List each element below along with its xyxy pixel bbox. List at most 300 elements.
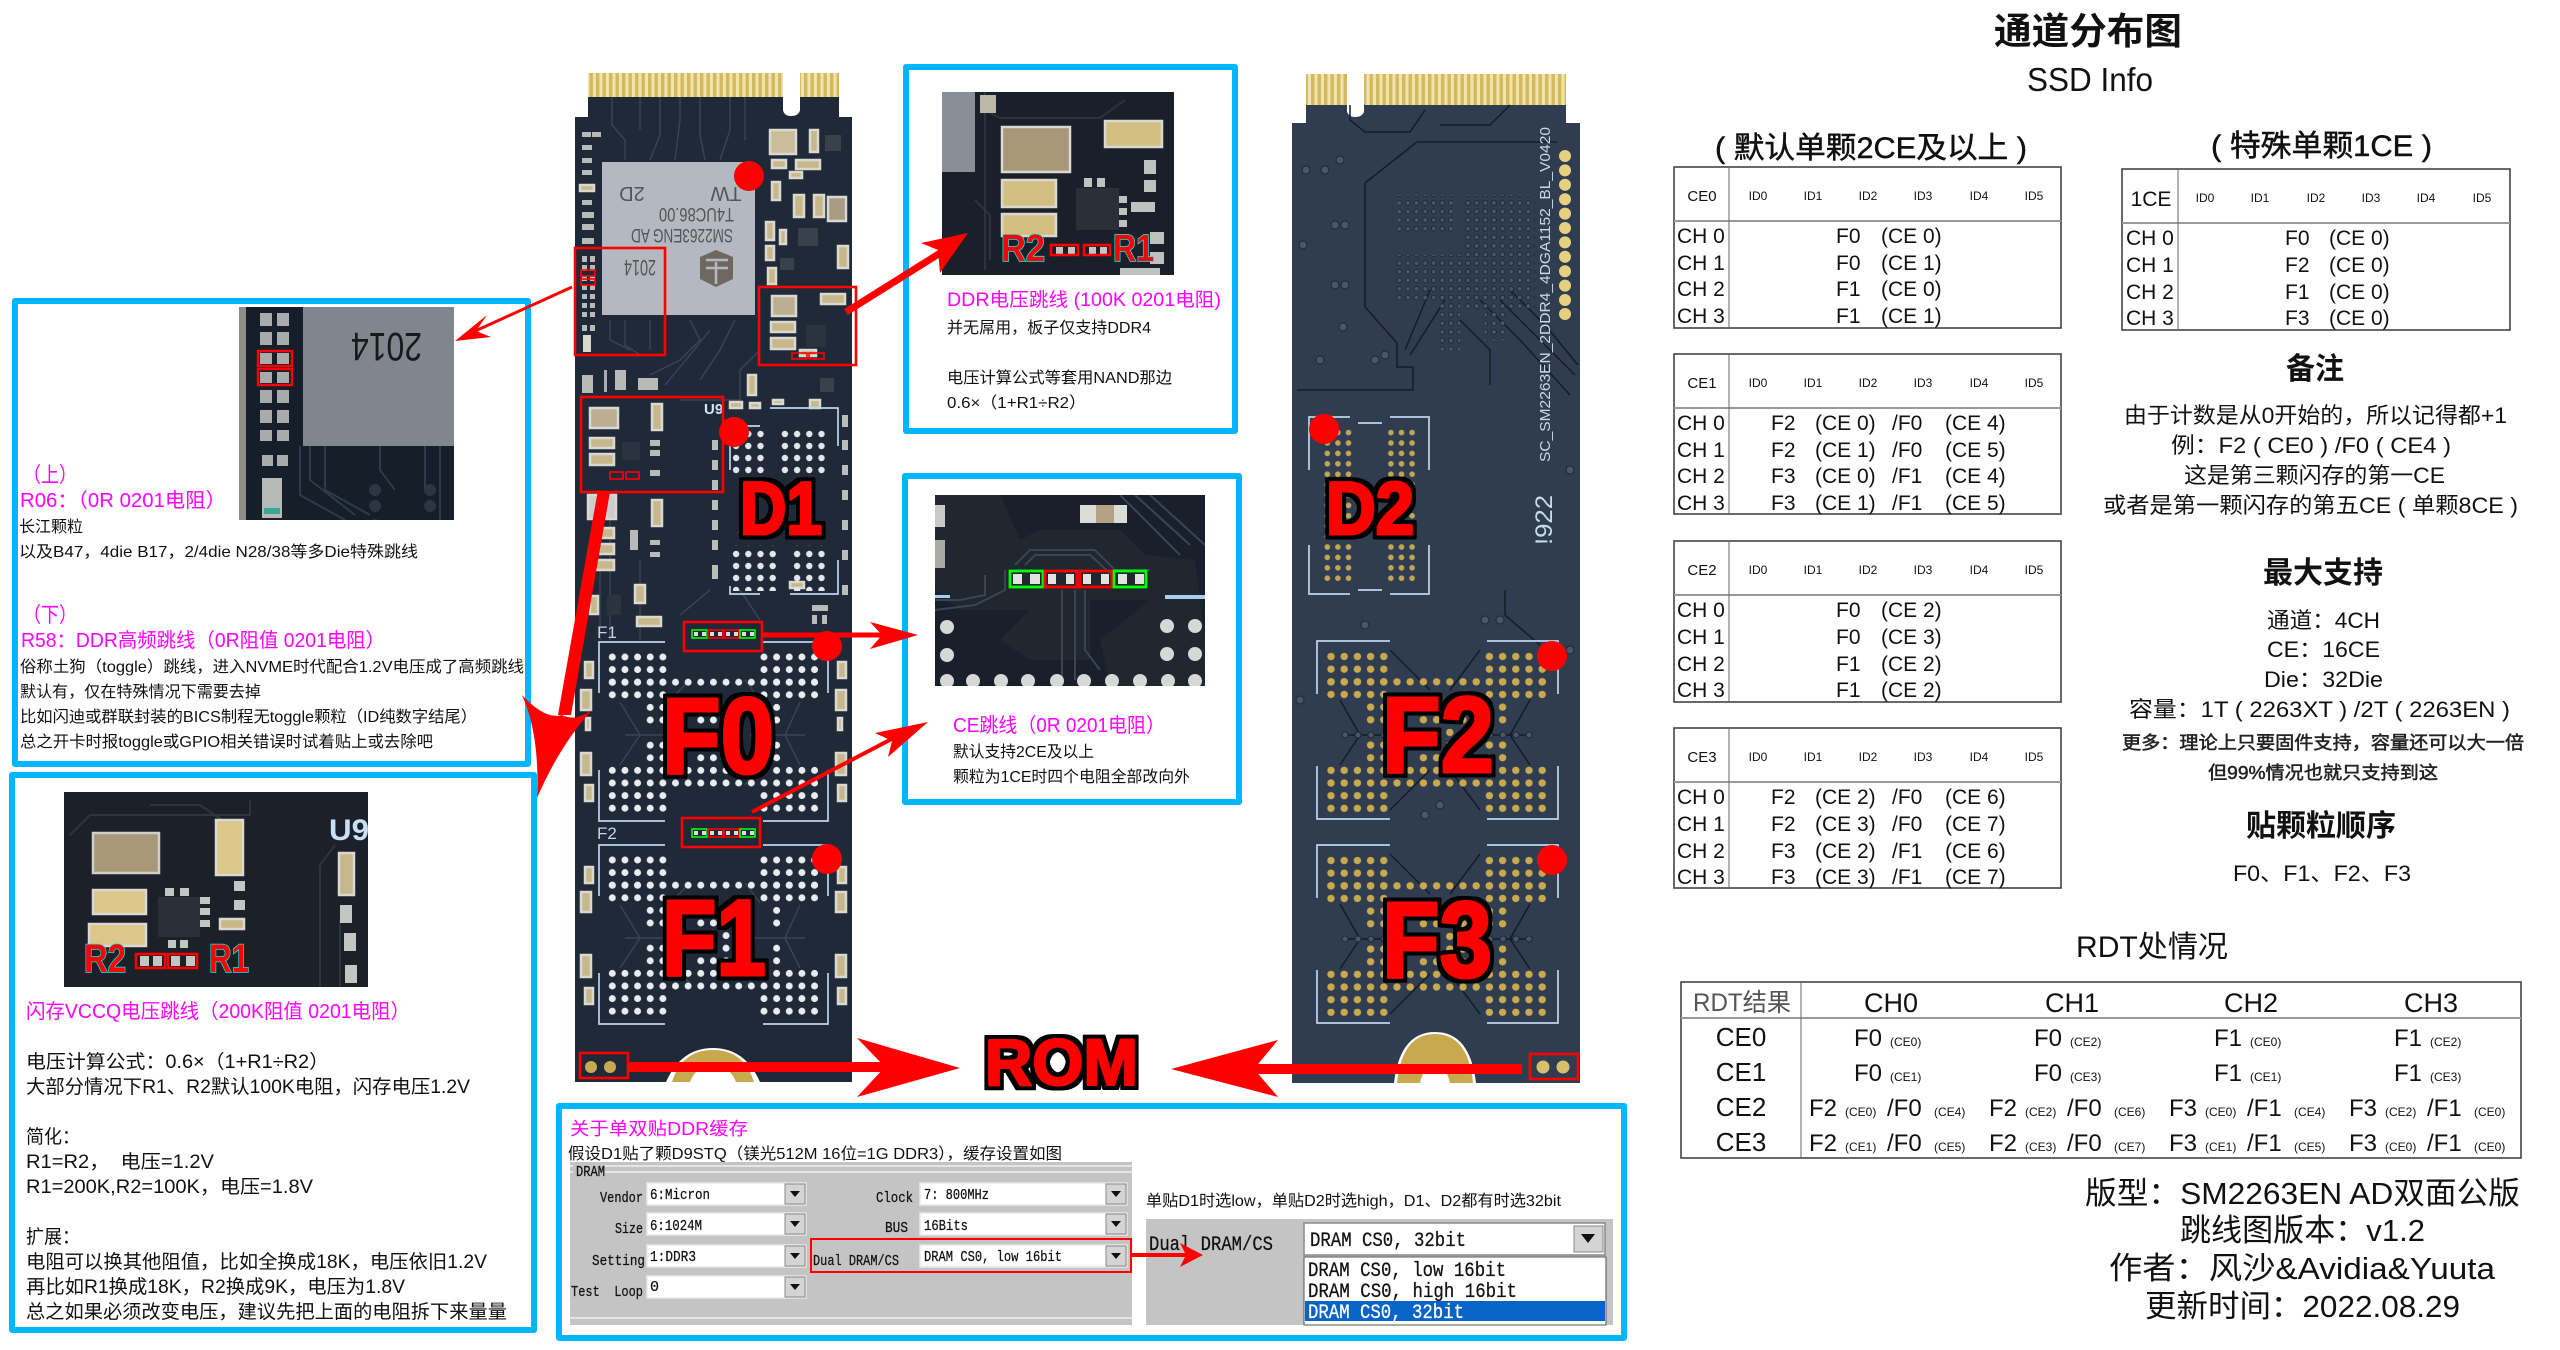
RDT table: F0: [1854, 1025, 1882, 1052]
RDT table: (CE2): [2070, 1035, 2101, 1049]
controller chip: T4UC86.00: [659, 203, 734, 224]
R06 heading: R06：（0R 0201电阻）: [20, 489, 226, 512]
table 1CE: ID5: [2473, 191, 2492, 205]
table 1CE: F3: [2285, 307, 2310, 330]
RDT table: (CE2): [2385, 1105, 2416, 1119]
RDT table: (CE1): [2205, 1140, 2236, 1154]
RDT table: /F0: [2067, 1095, 2102, 1122]
photo: DDR voltage close-up: [942, 92, 1174, 276]
table CE3: (CE 6): [1945, 786, 2006, 809]
table CE0: F0: [1836, 225, 1861, 248]
photo: DDR voltage close-up: R2: [1001, 228, 1045, 270]
table CE1: ID4: [1970, 376, 1989, 390]
RDT table: /F1: [2247, 1130, 2282, 1157]
table CE1: /F0: [1892, 412, 1922, 435]
DRAM settings dialog: 6:Micron: [650, 1187, 710, 1204]
silkscreen labels: [597, 401, 838, 843]
table CE0: ID1: [1804, 189, 1823, 203]
DRAM settings dialog: Vendor: [600, 1190, 643, 1207]
RDT table: [1681, 982, 2521, 1158]
table 1CE: CH 0: [2126, 227, 2174, 250]
table 1CE: ID0: [2196, 191, 2215, 205]
formula block: 大部分情况下R1、R2默认100K电阻，闪存电压1.2V: [26, 1076, 470, 1098]
RDT table: (CE6): [2114, 1105, 2145, 1119]
table CE1: (CE 1): [1815, 439, 1876, 462]
VCCQ heading: 闪存VCCQ电压跳线（200K阻值 0201电阻）: [26, 1000, 410, 1023]
table CE2: ID4: [1970, 563, 1989, 577]
table CE2: ID2: [1859, 563, 1878, 577]
DDR voltage description: 电压计算公式等套用NAND那边: [947, 368, 1172, 387]
RDT table: (CE0): [2205, 1105, 2236, 1119]
table CE1: CH 0: [1677, 412, 1725, 435]
RDT table: (CE7): [2114, 1140, 2145, 1154]
table CE0: (CE 0): [1881, 225, 1942, 248]
table CE1: ID2: [1859, 376, 1878, 390]
RDT table: (CE0): [1890, 1035, 1921, 1049]
table CE1: CH 1: [1677, 439, 1725, 462]
RDT table: CH0: [1864, 988, 1918, 1018]
F2: F2: [1382, 674, 1494, 795]
gold edge connector: [1306, 74, 1566, 105]
RDT table: (CE1): [1845, 1140, 1876, 1154]
DRAM settings dialog: 0: [650, 1279, 659, 1296]
controller chip: TW: [710, 182, 742, 204]
DRAM dropdown dialog: DRAM CS0, 32bit: [1310, 1230, 1466, 1253]
extended block: 总之如果必须改变电压，建议先把上面的电阻拆下来量量: [26, 1301, 507, 1323]
DRAM dropdown dialog: [1146, 1219, 1613, 1325]
max support heading: 最大支持: [2263, 557, 2383, 590]
table CE0: CH 2: [1677, 278, 1725, 301]
RDT table: (CE0): [2385, 1140, 2416, 1154]
table CE0: F0: [1836, 252, 1861, 275]
DDR cache description: 假设D1贴了颗D9STQ（镁光512M 16位=1G DDR3），缓存设置如图: [568, 1145, 1062, 1163]
table CE3: (CE 2): [1815, 786, 1876, 809]
table CE3: (CE 7): [1945, 866, 2006, 889]
RDT table: F1: [2394, 1025, 2422, 1052]
F3: F3: [1382, 879, 1492, 1000]
RDT table: (CE4): [2294, 1105, 2325, 1119]
table CE3: /F1: [1892, 840, 1922, 863]
table 1CE: F1: [2285, 281, 2310, 304]
simplified block: [26, 1126, 313, 1198]
DRAM settings dialog: DRAM: [576, 1164, 605, 1181]
RDT table: F2: [1989, 1095, 2017, 1122]
table CE1: F3: [1771, 492, 1796, 515]
notes text: 例：F2 ( CE0 ) /F0 ( CE4 ): [2171, 433, 2451, 458]
R58 description: 俗称土狗（toggle）跳线，进入NVME时代配合1.2V电压成了高频跳线: [20, 658, 524, 676]
table CE3: ID5: [2025, 750, 2044, 764]
arrow: R06 box to R06 photo: [455, 287, 572, 341]
DRAM settings dialog: BUS: [885, 1220, 908, 1237]
DDR voltage description: 并无屌用，板子仅支持DDR4: [947, 319, 1151, 337]
F0: F0: [662, 675, 774, 796]
table CE0: CH 0: [1677, 225, 1725, 248]
table CE2: ID1: [1804, 563, 1823, 577]
D2 label: D2: [1326, 467, 1414, 550]
formula block: [26, 1051, 470, 1098]
R58 description: [20, 658, 524, 751]
F1: F1: [662, 877, 766, 998]
RDT table: RDT结果: [1693, 989, 1791, 1017]
credits block: 作者：风沙&Avidia&Yuuta: [2109, 1251, 2496, 1286]
NAND ball grids F2 F3: [1317, 641, 1558, 1023]
R06 description: 长江颗粒: [19, 518, 83, 536]
NAND ball grids F0 F1: [599, 642, 828, 1024]
credits block: 跳线图版本：v1.2: [2180, 1213, 2425, 1248]
notes text: 由于计数是从0开始的，所以记得都+1: [2124, 403, 2507, 428]
table CE1: /F1: [1892, 465, 1922, 488]
R58 heading: R58：DDR高频跳线（0R阻值 0201电阻）: [21, 629, 385, 652]
DRAM settings dialog: Test Loop: [571, 1284, 643, 1301]
table CE3: CH 2: [1677, 840, 1725, 863]
mount order heading: 贴颗粒顺序: [2246, 810, 2396, 843]
R58 description: 默认有，仅在特殊情况下需要去掉: [20, 683, 261, 701]
table 1CE: (CE 0): [2329, 307, 2390, 330]
RDT table: CH2: [2224, 988, 2278, 1018]
table CE0: F1: [1836, 305, 1861, 328]
panel: DDR voltage jumper: [906, 67, 1235, 431]
panel: CE jumper: [905, 476, 1239, 802]
DDR voltage description: 0.6×（1+R1÷R2）: [947, 394, 1086, 412]
RDT table: CH3: [2404, 988, 2458, 1018]
DRAM dropdown dialog: DRAM CS0, low 16bit: [1308, 1260, 1506, 1283]
table CE1: /F0: [1892, 439, 1922, 462]
notes heading: 备注: [2286, 353, 2344, 386]
max support text: Die：32Die: [2264, 667, 2383, 692]
notes text: 或者是第一颗闪存的第五CE ( 单颗8CE ): [2103, 493, 2518, 518]
table CE3: ID3: [1914, 750, 1933, 764]
table CE0: ID4: [1970, 189, 1989, 203]
extended block: 再比如R1换成18K，R2换成9K，电压为1.8V: [26, 1276, 405, 1298]
RDT table: (CE1): [1890, 1070, 1921, 1084]
DRAM settings dialog: Dual DRAM/CS: [813, 1253, 899, 1270]
table CE0: (CE 1): [1881, 252, 1942, 275]
table CE0: F1: [1836, 278, 1861, 301]
back side traces and vias: [1296, 105, 1578, 819]
credits block: 更新时间：2022.08.29: [2145, 1289, 2460, 1324]
R06 description: [19, 518, 418, 561]
table CE1: (CE 5): [1945, 492, 2006, 515]
R58 description: 比如闪迪或群联封装的BICS制程无toggle颗粒（ID纯数字结尾）: [20, 708, 477, 726]
RDT table: (CE0): [1845, 1105, 1876, 1119]
DRAM settings dialog: 6:1024M: [650, 1218, 702, 1235]
DRAM settings dialog: 16Bits: [924, 1218, 968, 1235]
max support text: [2122, 608, 2524, 783]
RDT table: F2: [1989, 1130, 2017, 1157]
jumper highlight boxes: [575, 248, 856, 1078]
RDT table: (CE2): [2025, 1105, 2056, 1119]
RDT table: CH1: [2045, 988, 2099, 1018]
panel: VCCQ voltage jumper: [12, 775, 534, 1330]
table CE1: CE1: [1687, 375, 1717, 392]
table 1CE: CH 2: [2126, 281, 2174, 304]
table CE0: ID0: [1749, 189, 1768, 203]
PCB traces and small parts: [580, 97, 848, 1004]
table CE2: CH 0: [1677, 599, 1725, 622]
silkscreen labels: F1: [597, 623, 617, 642]
pin-1 dots: [719, 161, 842, 874]
controller chip: [602, 162, 755, 315]
photo: VCCQ close-up: R1: [209, 937, 249, 981]
silkscreen date code: !922: [1531, 495, 1558, 545]
max support text: 容量：1T ( 2263XT ) /2T ( 2263EN ): [2129, 697, 2510, 722]
table 1CE: 1CE: [2131, 188, 2171, 211]
RDT table: (CE2): [2430, 1035, 2461, 1049]
table 1CE: (CE 0): [2329, 281, 2390, 304]
pin-1 dots: [1309, 414, 1567, 875]
table 1CE: ID3: [2362, 191, 2381, 205]
controller chip: SM2263ENG AD: [631, 224, 733, 245]
table CE3: ID1: [1804, 750, 1823, 764]
table CE3: /F0: [1892, 813, 1922, 836]
credits block: 版型：SM2263EN AD双面公版: [2085, 1176, 2520, 1211]
RDT table: F3: [2169, 1130, 2197, 1157]
RDT table: (CE0): [2474, 1105, 2505, 1119]
DRAM dropdown dialog: DRAM CS0, high 16bit: [1308, 1281, 1517, 1304]
RDT table: (CE1): [2250, 1070, 2281, 1084]
RDT table: (CE3): [2070, 1070, 2101, 1084]
table CE2: CH 3: [1677, 679, 1725, 702]
extended block: [26, 1226, 507, 1323]
board body: [575, 97, 852, 1082]
simplified block: 简化：: [26, 1126, 80, 1148]
RDT table: (CE0): [2250, 1035, 2281, 1049]
max support text: 更多：理论上只要固件支持，容量还可以大一倍: [2122, 733, 2524, 753]
mount order text: F0、F1、F2、F3: [2233, 861, 2411, 886]
table CE3: (CE 3): [1815, 813, 1876, 836]
table CE0: ID2: [1859, 189, 1878, 203]
table CE2: F1: [1836, 679, 1861, 702]
table CE3: ID4: [1970, 750, 1989, 764]
max support text: 但99%情况也就只支持到这: [2208, 763, 2438, 783]
photo: VCCQ close-up: U9: [329, 814, 369, 847]
table CE3: ID0: [1749, 750, 1768, 764]
DRAM settings dialog: Clock: [876, 1190, 913, 1207]
CE jumper description: [953, 743, 1190, 786]
RDT table: (CE3): [2025, 1140, 2056, 1154]
table 1CE: F2: [2285, 254, 2310, 277]
RDT table: /F0: [1887, 1095, 1922, 1122]
RDT table: (CE4): [1934, 1105, 1965, 1119]
RDT table: F2: [1809, 1095, 1837, 1122]
arrow: CE box to CE text: [752, 722, 928, 812]
ROM pads box: [1530, 1054, 1578, 1079]
panel: R06 R58 jumpers: [15, 301, 528, 764]
RDT table: F1: [2214, 1025, 2242, 1052]
DRAM ball grid D2: [1309, 417, 1429, 594]
table CE1: [1674, 354, 2061, 515]
DRAM dropdown dialog: DRAM CS0, 32bit: [1308, 1302, 1464, 1325]
table CE3: F3: [1771, 840, 1796, 863]
DRAM ball grid D1: [730, 428, 830, 591]
table CE1: F3: [1771, 465, 1796, 488]
formula block: 电压计算公式：0.6×（1+R1÷R2）: [26, 1051, 329, 1073]
DRAM settings dialog: Size: [615, 1221, 643, 1238]
table CE1: ID0: [1749, 376, 1768, 390]
heading: default 2CE: ( 默认单颗2CE及以上 ): [1715, 132, 2027, 165]
RDT table: (CE3): [2430, 1070, 2461, 1084]
RDT table: /F1: [2427, 1095, 2462, 1122]
DRAM settings dialog: 1:DDR3: [650, 1249, 696, 1266]
table CE1: ID5: [2025, 376, 2044, 390]
photo: VCCQ close-up: R2: [84, 937, 126, 981]
table CE1: (CE 4): [1945, 465, 2006, 488]
table CE1: /F1: [1892, 492, 1922, 515]
RDT table: F0: [2034, 1060, 2062, 1087]
table CE2: (CE 2): [1881, 599, 1942, 622]
RDT table: /F0: [1887, 1130, 1922, 1157]
table 1CE: (CE 0): [2329, 227, 2390, 250]
table CE3: CH 1: [1677, 813, 1725, 836]
table CE2: (CE 3): [1881, 626, 1942, 649]
DRAM settings dialog: 7: 800MHz: [924, 1187, 989, 1204]
table CE3: (CE 2): [1815, 840, 1876, 863]
DRAM settings dialog: [570, 1162, 1132, 1325]
mounting hole: [672, 1050, 754, 1082]
RDT table: (CE0): [2474, 1140, 2505, 1154]
back side gold pads column: [1559, 150, 1571, 320]
table 1CE: [2122, 169, 2510, 330]
R58 description: 总之开卡时报toggle或GPIO相关错误时试着贴上或去除吧: [20, 733, 433, 751]
photo: R06 R58 close-up: [239, 307, 454, 531]
table 1CE: CH 1: [2126, 254, 2174, 277]
title: 通道分布图: [1994, 11, 2182, 52]
ROM label: ROM: [985, 1025, 1138, 1099]
RDT table: /F0: [2067, 1130, 2102, 1157]
table 1CE: F0: [2285, 227, 2310, 250]
table CE0: [1674, 167, 2061, 328]
extended block: 电阻可以换其他阻值，比如全换成18K，电压依旧1.2V: [26, 1251, 487, 1273]
table CE3: [1674, 728, 2061, 889]
table CE3: /F1: [1892, 866, 1922, 889]
table CE3: ID2: [1859, 750, 1878, 764]
RDT table: F1: [2394, 1060, 2422, 1087]
table 1CE: CH 3: [2126, 307, 2174, 330]
silkscreen labels: U9: [704, 401, 723, 418]
notes text: 这是第三颗闪存的第一CE: [2184, 463, 2445, 488]
table 1CE: ID4: [2417, 191, 2436, 205]
table CE0: ID3: [1914, 189, 1933, 203]
photo: VCCQ close-up: [64, 792, 369, 987]
table CE2: F0: [1836, 599, 1861, 622]
table CE1: ID1: [1804, 376, 1823, 390]
right PCB board (back side): [1292, 74, 1580, 1083]
RDT table: CE3: [1716, 1127, 1766, 1157]
table CE1: CH 2: [1677, 465, 1725, 488]
arrow: left ROM pads to ROM: [628, 1038, 960, 1097]
arrow: DDR voltage box to photo: [846, 233, 968, 312]
arrow: right ROM pads to ROM: [1171, 1040, 1522, 1097]
DRAM settings dialog: Setting: [592, 1253, 645, 1270]
table CE2: F0: [1836, 626, 1861, 649]
table CE3: (CE 7): [1945, 813, 2006, 836]
max support text: 通道：4CH: [2267, 608, 2380, 633]
table 1CE: ID1: [2251, 191, 2270, 205]
RDT table: /F1: [2427, 1130, 2462, 1157]
photo: DDR voltage close-up: R1: [1113, 228, 1154, 270]
table CE3: F2: [1771, 813, 1796, 836]
DRAM dropdown dialog: Dual DRAM/CS: [1149, 1234, 1273, 1257]
table CE0: (CE 0): [1881, 278, 1942, 301]
table CE3: F3: [1771, 866, 1796, 889]
RDT table: CE1: [1716, 1057, 1766, 1087]
D1 label: D1: [740, 467, 822, 550]
table CE1: CH 3: [1677, 492, 1725, 515]
table CE2: (CE 2): [1881, 679, 1942, 702]
DDR cache heading: 关于单双贴DDR缓存: [570, 1119, 748, 1139]
RDT table: F3: [2169, 1095, 2197, 1122]
RDT table: F0: [2034, 1025, 2062, 1052]
RDT table: F3: [2349, 1130, 2377, 1157]
table CE1: F2: [1771, 412, 1796, 435]
R58 heading: （下）: [23, 604, 77, 627]
board body: [1292, 105, 1580, 1083]
table CE1: (CE 1): [1815, 492, 1876, 515]
table CE1: F2: [1771, 439, 1796, 462]
table CE0: CH 3: [1677, 305, 1725, 328]
dual DRAM note: 单贴D1时选low，单贴D2时选high，D1、D2都有时选32bit: [1146, 1192, 1562, 1210]
simplified block: R1=200K,R2=100K，电压=1.8V: [26, 1176, 313, 1198]
simplified block: R1=R2， 电压=1.2V: [26, 1151, 214, 1173]
mounting hole: [1397, 1034, 1473, 1083]
table CE2: CH 1: [1677, 626, 1725, 649]
table CE2: [1674, 541, 2061, 702]
extended block: 扩展：: [26, 1226, 80, 1248]
RDT table: /F1: [2247, 1095, 2282, 1122]
table CE3: F2: [1771, 786, 1796, 809]
photo: R06 R58 close-up: 2014: [351, 324, 422, 368]
table CE1: ID3: [1914, 376, 1933, 390]
table CE3: CH 3: [1677, 866, 1725, 889]
table CE2: ID3: [1914, 563, 1933, 577]
silkscreen labels: F2: [597, 824, 617, 843]
large NAND labels: [662, 674, 1494, 1000]
RDT table: F0: [1854, 1060, 1882, 1087]
CE jumper description: 颗粒为1CE时四个电阻全部改向外: [953, 768, 1190, 786]
RDT table: (CE5): [2294, 1140, 2325, 1154]
controller chip: 2014: [624, 255, 656, 280]
subtitle: SSD Info: [2027, 61, 2153, 98]
RDT heading: RDT处情况: [2076, 931, 2228, 964]
arrow: Dual DRAM selection to dropdown: [1131, 1243, 1203, 1267]
credits block: [2085, 1176, 2520, 1324]
arrow: VCCQ box to VCCQ panel: [522, 490, 610, 798]
table CE3: CH 0: [1677, 786, 1725, 809]
RDT table: F3: [2349, 1095, 2377, 1122]
table CE0: CE0: [1687, 188, 1717, 205]
table CE0: (CE 1): [1881, 305, 1942, 328]
table CE3: /F0: [1892, 786, 1922, 809]
left PCB board (front side): [575, 73, 856, 1082]
RDT table: F1: [2214, 1060, 2242, 1087]
gold edge connector: [588, 73, 839, 97]
R06 heading: [20, 464, 226, 512]
table CE2: CH 2: [1677, 653, 1725, 676]
silkscreen part number: SC_SM2263EN_2DDR4_4DGA1152_BL_V0420: [1537, 127, 1554, 462]
table CE1: (CE 0): [1815, 465, 1876, 488]
max support text: CE：16CE: [2267, 637, 2380, 662]
R06 description: 以及B47，4die B17，2/4die N28/38等多Die特殊跳线: [19, 543, 418, 561]
R06 heading: （上）: [23, 464, 77, 487]
DDR voltage heading: DDR电压跳线 (100K 0201电阻): [947, 289, 1221, 311]
table CE1: (CE 4): [1945, 412, 2006, 435]
DDR voltage description: [947, 319, 1172, 412]
table CE3: (CE 6): [1945, 840, 2006, 863]
table 1CE: ID2: [2307, 191, 2326, 205]
table CE1: (CE 0): [1815, 412, 1876, 435]
CE jumper description: 默认支持2CE及以上: [953, 743, 1094, 761]
table CE3: CE3: [1687, 749, 1717, 766]
